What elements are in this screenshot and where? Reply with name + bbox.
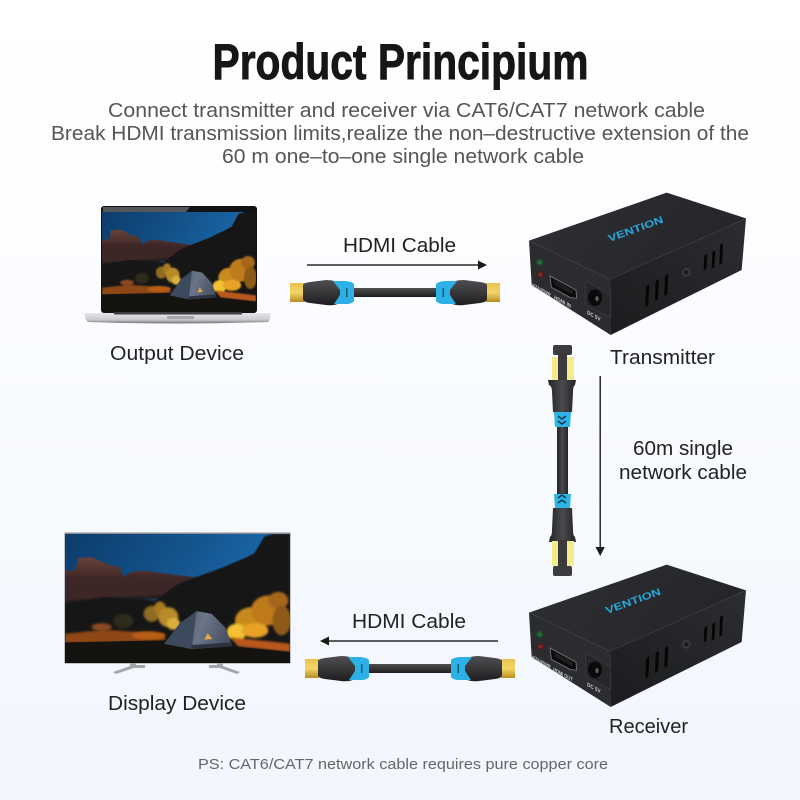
label: display device: Display Device bbox=[108, 693, 246, 715]
subtitle text block: 60 m one–to–one single network cable bbox=[222, 145, 584, 168]
icon: top HDMI cable bbox=[290, 280, 500, 305]
icon: bottom HDMI cable bbox=[305, 656, 515, 681]
title: Product Principium bbox=[212, 34, 588, 90]
arrow: transmitter to receiver bbox=[596, 376, 605, 556]
panel: display device TV bbox=[64, 532, 291, 674]
transmitter brand: VENTION bbox=[607, 215, 665, 245]
laptop base bbox=[85, 312, 270, 324]
TV screen image bbox=[65, 534, 291, 663]
arrow: receiver to display device bbox=[320, 636, 498, 646]
panel: output device laptop bbox=[85, 206, 270, 324]
label: bottom HDMI cable: HDMI Cable bbox=[352, 611, 466, 633]
receiver port labels: STA/PWR bbox=[532, 655, 551, 671]
panel: transmitter box bbox=[529, 193, 746, 335]
label: 60m single network cable: 60m single bbox=[633, 438, 733, 460]
label: receiver: Receiver bbox=[609, 716, 688, 738]
transmitter port labels: DC 5V bbox=[587, 310, 601, 323]
subtitle text block: Connect transmitter and receiver via CAT6/CAT7 network cable bbox=[108, 99, 705, 122]
receiver brand: VENTION bbox=[604, 587, 663, 617]
transmitter port labels: HDMI IN bbox=[554, 295, 571, 310]
label: transmitter: Transmitter bbox=[610, 347, 715, 369]
receiver port labels: DC 5V bbox=[587, 682, 601, 695]
subtitle text block: Break HDMI transmission limits,realize the non–destructive extension of the bbox=[51, 122, 749, 145]
label: output device: Output Device bbox=[110, 343, 244, 365]
label: 60m single network cable bbox=[619, 438, 747, 484]
receiver port labels bbox=[532, 655, 601, 695]
label: top HDMI cable: HDMI Cable bbox=[343, 235, 456, 257]
transmitter port labels: STA/PWR bbox=[532, 283, 551, 299]
TV stand bbox=[113, 663, 240, 674]
laptop screen image bbox=[102, 212, 257, 310]
transmitter port labels bbox=[532, 283, 601, 323]
receiver port labels: HDMI OUT bbox=[553, 667, 573, 684]
icon: network cable bbox=[548, 345, 576, 576]
panel: receiver box bbox=[529, 565, 746, 707]
subtitle text block bbox=[51, 99, 749, 168]
label: 60m single network cable: network cable bbox=[619, 462, 747, 484]
arrow: output device to transmitter bbox=[307, 260, 487, 270]
footnote: PS: CAT6/CAT7 network cable requires pure copper core bbox=[198, 756, 608, 773]
